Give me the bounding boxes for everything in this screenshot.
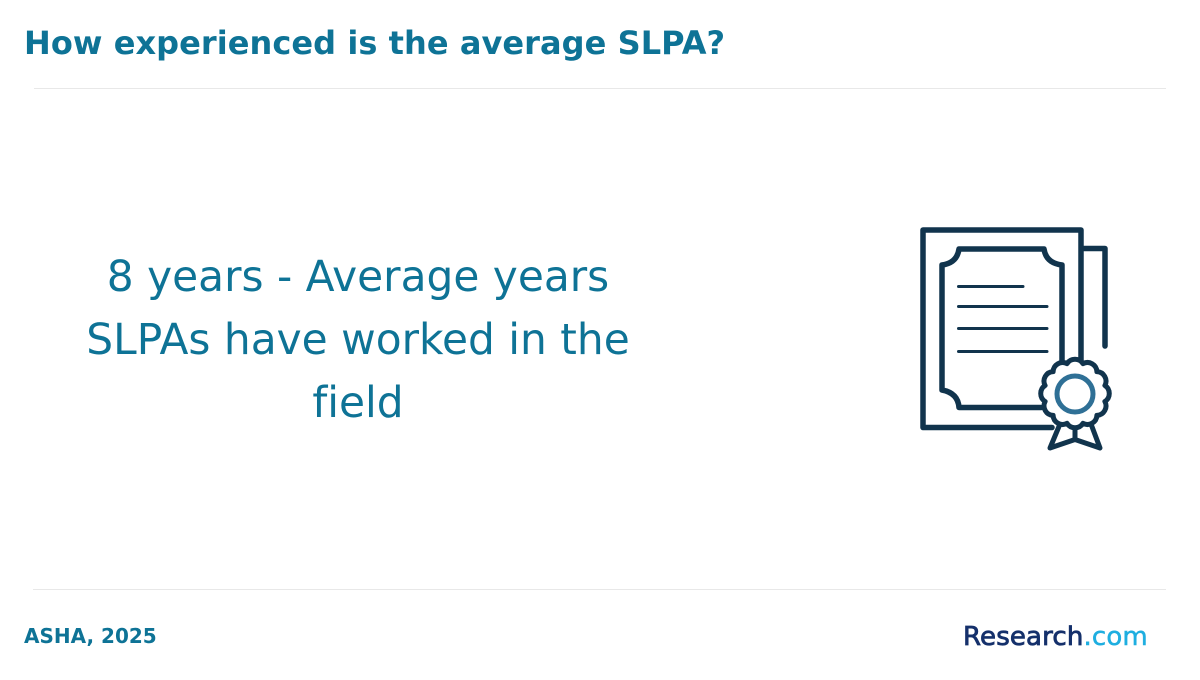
rosette centre ring bbox=[1057, 376, 1093, 412]
source: ASHA, 2025 bbox=[24, 624, 157, 648]
certificate outer frame bbox=[923, 230, 1081, 428]
back sheet bbox=[1082, 248, 1105, 346]
main statistic text: SLPAs have worked in the bbox=[86, 315, 630, 364]
title: How experienced is the average SLPA? bbox=[24, 24, 725, 62]
text lines bbox=[958, 286, 1047, 352]
logo: Research.com: Research.com bbox=[963, 622, 1148, 652]
rosette seal bbox=[1041, 359, 1109, 428]
main statistic text: field bbox=[312, 378, 404, 427]
ribbon bbox=[1050, 424, 1100, 448]
inner ornate border bbox=[942, 249, 1062, 408]
main statistic text bbox=[86, 252, 630, 427]
main statistic text: 8 years - Average years bbox=[107, 252, 609, 301]
icon: certificate with rosette bbox=[920, 227, 1112, 450]
